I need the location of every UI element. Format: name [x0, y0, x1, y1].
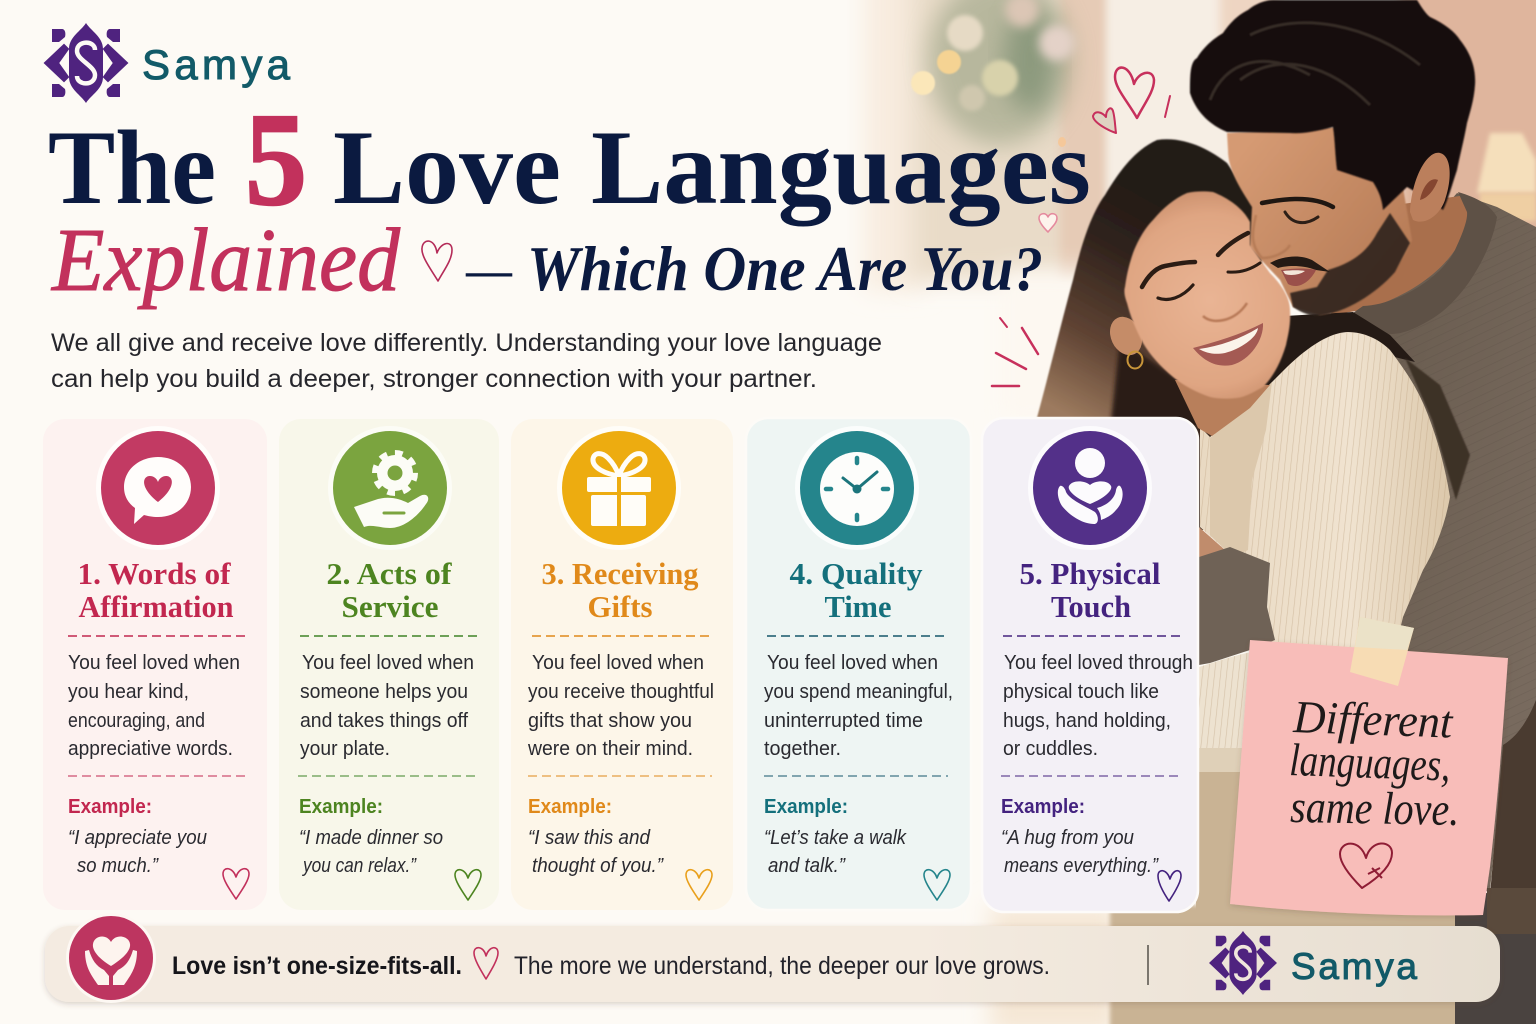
example: “Let’s take a walk	[764, 827, 907, 849]
woman eyebrows	[1142, 262, 1195, 287]
description: you spend meaningful,	[764, 681, 953, 703]
description: and takes things off	[300, 710, 468, 732]
woman smile	[1193, 323, 1263, 366]
description: You feel loved when	[68, 652, 240, 674]
description	[68, 652, 240, 760]
man hair highlights	[1210, 23, 1420, 105]
heading: 5. Physical	[1020, 556, 1161, 591]
description: hugs, hand holding,	[1003, 710, 1171, 732]
example: thought of you.”	[532, 855, 664, 877]
icon: banner heart	[474, 948, 498, 979]
heading: Touch	[1051, 589, 1131, 624]
heading: Gifts	[588, 589, 652, 624]
panel: quality time	[746, 418, 971, 910]
title line 1: The	[48, 109, 216, 226]
title line 2	[50, 211, 1043, 310]
example: Example:	[299, 796, 383, 818]
icon: heart	[223, 869, 249, 899]
description: or cuddles.	[1003, 738, 1098, 760]
description: physical touch like	[1003, 681, 1159, 703]
icon: hand with gear	[328, 426, 452, 550]
panel: physical touch	[982, 418, 1198, 912]
description: your plate.	[300, 738, 390, 760]
description	[1003, 652, 1193, 760]
example	[1001, 796, 1159, 877]
description	[527, 652, 714, 760]
note text: languages,	[1289, 734, 1451, 791]
man hair	[1190, 0, 1475, 210]
example: Example:	[68, 796, 152, 818]
example: so much.”	[77, 855, 159, 877]
logo: Samya	[45, 23, 291, 103]
sweater lower dark area	[1490, 700, 1536, 895]
icon: title heart	[422, 241, 452, 281]
icon: speech bubble heart	[96, 426, 220, 550]
woman collar	[1210, 382, 1272, 557]
description: you hear kind,	[68, 681, 189, 703]
man neck	[1330, 195, 1470, 315]
title line 2: —	[465, 232, 513, 305]
note text: same love.	[1290, 781, 1460, 835]
heading: Time	[824, 589, 892, 624]
woman cuff	[1199, 652, 1252, 753]
example: Example:	[764, 796, 848, 818]
woman eyes	[1158, 285, 1193, 299]
man face	[1227, 127, 1412, 315]
intro text: can help you build a deeper, stronger connection with your partner.	[51, 365, 817, 393]
lower body and floor	[1196, 760, 1466, 910]
icon: gift	[557, 426, 681, 550]
photo: couple embracing	[1035, 0, 1536, 1024]
panel: words of affirmation	[43, 419, 267, 910]
heading: Service	[342, 589, 438, 624]
bottom banner	[45, 913, 1500, 1003]
panel: receiving gifts	[511, 419, 733, 910]
description: appreciative words.	[68, 738, 233, 760]
woman nose	[1203, 303, 1247, 321]
example: you can relax.”	[301, 855, 417, 877]
example: and talk.”	[768, 855, 846, 877]
description: together.	[764, 738, 841, 760]
description: uninterrupted time	[764, 710, 923, 732]
man moustache	[1270, 256, 1330, 272]
icon: heart	[686, 870, 712, 900]
dark gap between arm and torso	[1405, 358, 1470, 500]
example	[528, 796, 664, 877]
example	[764, 796, 907, 877]
example: “I made dinner so	[299, 827, 443, 849]
example: “I appreciate you	[68, 827, 207, 849]
description	[300, 652, 474, 760]
heading	[1020, 556, 1161, 624]
sticky note	[1230, 617, 1508, 915]
note text	[1289, 691, 1460, 835]
description: someone helps you	[300, 681, 468, 703]
banner message: The more we understand, the deeper our love grows.	[514, 952, 1050, 980]
man ear	[1410, 153, 1450, 222]
icon: heart	[924, 870, 950, 900]
example	[68, 796, 207, 877]
example: Example:	[1001, 796, 1085, 818]
man sweater	[1340, 193, 1536, 900]
title line 2: Explained	[50, 211, 401, 310]
intro text	[51, 329, 882, 393]
title line 1	[48, 85, 1091, 233]
example: “I saw this and	[528, 827, 651, 849]
sweater hem	[1487, 888, 1536, 934]
woman ear and earring	[1104, 312, 1148, 360]
icon: hands holding heart	[66, 913, 156, 1003]
heading: 2. Acts of	[326, 556, 452, 591]
sweater collar	[1353, 192, 1497, 334]
tape	[1350, 617, 1414, 686]
heading	[542, 556, 699, 624]
description: You feel loved when	[767, 652, 938, 674]
description: You feel loved when	[302, 652, 474, 674]
title line 1: Languages	[591, 109, 1091, 226]
heading: 3. Receiving	[542, 556, 699, 591]
note text: Different	[1292, 691, 1455, 748]
heading	[790, 556, 923, 624]
example: means everything.”	[1004, 855, 1159, 877]
title line 1: 5	[245, 85, 307, 233]
example	[299, 796, 443, 877]
icon: heart with arrow	[1340, 843, 1392, 888]
woman hair back	[1035, 139, 1262, 425]
logo mark	[45, 23, 127, 103]
banner text: Love isn’t one-size-fits-all.	[172, 952, 462, 980]
woman sleeve and body	[1200, 332, 1450, 650]
panel: acts of service	[279, 419, 499, 910]
banner logo	[1210, 931, 1417, 995]
description: encouraging, and	[68, 710, 205, 732]
woman hair strands at card edge	[1190, 425, 1220, 530]
description: You feel loved through	[1004, 652, 1193, 674]
banner logo: Samya	[1291, 946, 1417, 987]
dark under chin	[1250, 312, 1415, 420]
doodle hearts and sparks	[992, 68, 1170, 386]
icon: clock	[795, 426, 919, 550]
description: were on their mind.	[527, 738, 693, 760]
man mouth	[1281, 268, 1316, 286]
description: you receive thoughtful	[528, 681, 714, 703]
man forearm cuff	[1199, 547, 1275, 665]
description: You feel loved when	[532, 652, 704, 674]
icon: person hugging heart	[1028, 426, 1152, 550]
man nose shadow	[1253, 215, 1290, 258]
heading	[326, 556, 452, 624]
title line 2: Which One Are You?	[527, 233, 1043, 304]
photo: blurred room background	[865, 0, 1536, 1024]
man eyebrow and eye	[1262, 199, 1333, 207]
heading: 1. Words of	[78, 556, 231, 591]
icon: heart	[1158, 871, 1181, 901]
woman hand under cuff	[1199, 527, 1233, 562]
icon: heart	[455, 870, 481, 900]
heading: 4. Quality	[790, 556, 923, 591]
woman neck	[1175, 380, 1270, 436]
description	[764, 652, 953, 760]
heading	[78, 556, 234, 624]
woman hair shadow	[1110, 340, 1210, 430]
example: “A hug from you	[1001, 827, 1134, 849]
title line 1: Love	[333, 109, 561, 226]
man beard	[1290, 213, 1410, 316]
description: gifts that show you	[528, 710, 692, 732]
example: Example:	[528, 796, 612, 818]
intro text: We all give and receive love differently. Understanding your love language	[51, 329, 882, 357]
logo wordmark: Samya	[142, 41, 291, 88]
woman face	[1124, 191, 1290, 399]
heading: Affirmation	[78, 589, 234, 624]
